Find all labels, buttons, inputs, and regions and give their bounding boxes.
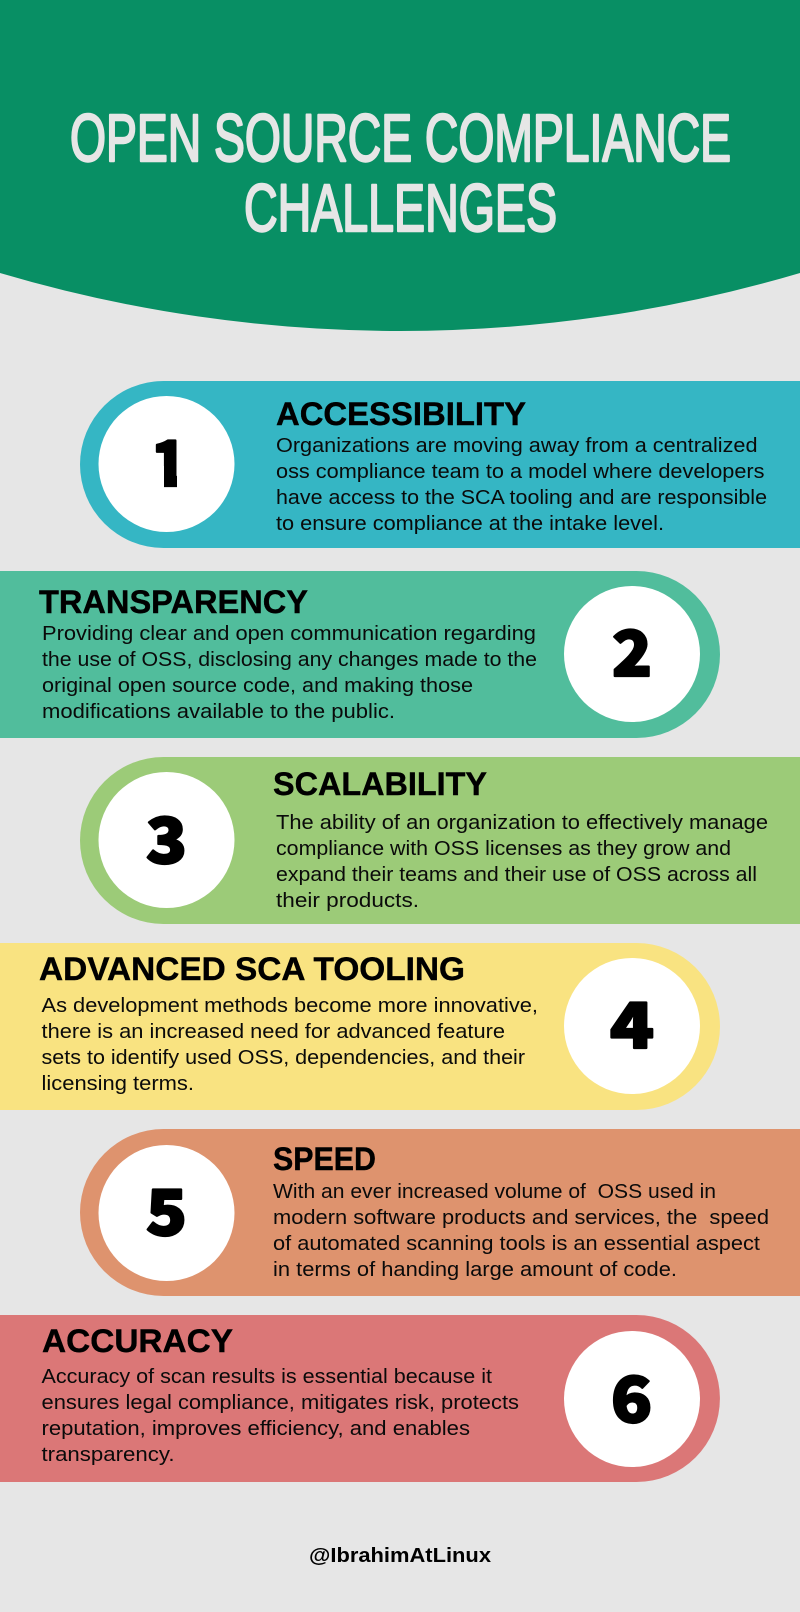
number badge 5 [98, 1145, 234, 1281]
description: transparency. [42, 1444, 174, 1466]
description: to ensure compliance at the intake level. [276, 513, 664, 535]
description: With an ever increased volume of OSS used in [273, 1181, 716, 1203]
panel: accuracy [0, 1315, 720, 1482]
description [273, 1181, 769, 1281]
description: expand their teams and their use of OSS across all [276, 864, 757, 886]
panel: scalability [80, 757, 800, 924]
title: CHALLENGES [244, 171, 557, 246]
description [42, 623, 537, 723]
heading: SPEED [273, 1141, 376, 1177]
number badge 6: 6 [611, 1350, 652, 1441]
number badge 6 [564, 1331, 700, 1467]
description: Organizations are moving away from a centralized [276, 435, 758, 457]
description: modifications available to the public. [42, 701, 395, 723]
description: modern software products and services, the speed [273, 1207, 769, 1229]
footer handle: @IbrahimAtLinux [309, 1545, 491, 1567]
header banner [0, 0, 800, 331]
description: their products. [276, 890, 419, 912]
description: the use of OSS, disclosing any changes made to the [42, 649, 537, 671]
description [42, 995, 538, 1095]
heading: SCALABILITY [273, 766, 487, 802]
number badge 2 [564, 586, 700, 722]
heading: TRANSPARENCY [39, 584, 308, 620]
number badge 1 [98, 396, 234, 532]
pill background [0, 943, 720, 1110]
description: there is an increased need for advanced feature [42, 1021, 505, 1043]
pill background [0, 1315, 720, 1482]
description: ensures legal compliance, mitigates risk, protects [42, 1392, 519, 1414]
description: original open source code, and making those [42, 675, 473, 697]
heading: ACCURACY [42, 1323, 233, 1359]
number badge 3: 3 [146, 791, 187, 882]
description: reputation, improves efficiency, and enables [42, 1418, 470, 1440]
heading: ACCESSIBILITY [276, 396, 526, 432]
number badge 2: 2 [612, 604, 652, 695]
number badge 4 [564, 958, 700, 1094]
description: licensing terms. [42, 1073, 194, 1095]
description: sets to identify used OSS, dependencies, and their [42, 1047, 525, 1069]
description: As development methods become more innovative, [42, 995, 538, 1017]
number badge 5: 5 [146, 1163, 187, 1254]
pill background [80, 381, 800, 548]
description [42, 1366, 519, 1466]
pill background [80, 757, 800, 924]
heading: ADVANCED SCA TOOLING [39, 951, 465, 987]
panel: speed [80, 1129, 800, 1296]
title [70, 101, 731, 246]
description: Accuracy of scan results is essential because it [42, 1366, 492, 1388]
number badge 3 [98, 772, 234, 908]
description: have access to the SCA tooling and are responsible [276, 487, 767, 509]
description: oss compliance team to a model where developers [276, 461, 764, 483]
description: in terms of handing large amount of code. [273, 1259, 677, 1281]
number badge 1: 1 [151, 414, 187, 505]
pill background [80, 1129, 800, 1296]
description: The ability of an organization to effectively manage [276, 812, 768, 834]
panel: accessibility [80, 381, 800, 548]
description: compliance with OSS licenses as they grow and [276, 838, 731, 860]
number badge 4: 4 [610, 976, 654, 1067]
description [276, 435, 767, 535]
panel: advanced sca tooling [0, 943, 720, 1110]
panel: transparency [0, 571, 720, 738]
pill background [0, 571, 720, 738]
description: Providing clear and open communication regarding [42, 623, 536, 645]
description: of automated scanning tools is an essential aspect [273, 1233, 760, 1255]
description [276, 812, 768, 912]
